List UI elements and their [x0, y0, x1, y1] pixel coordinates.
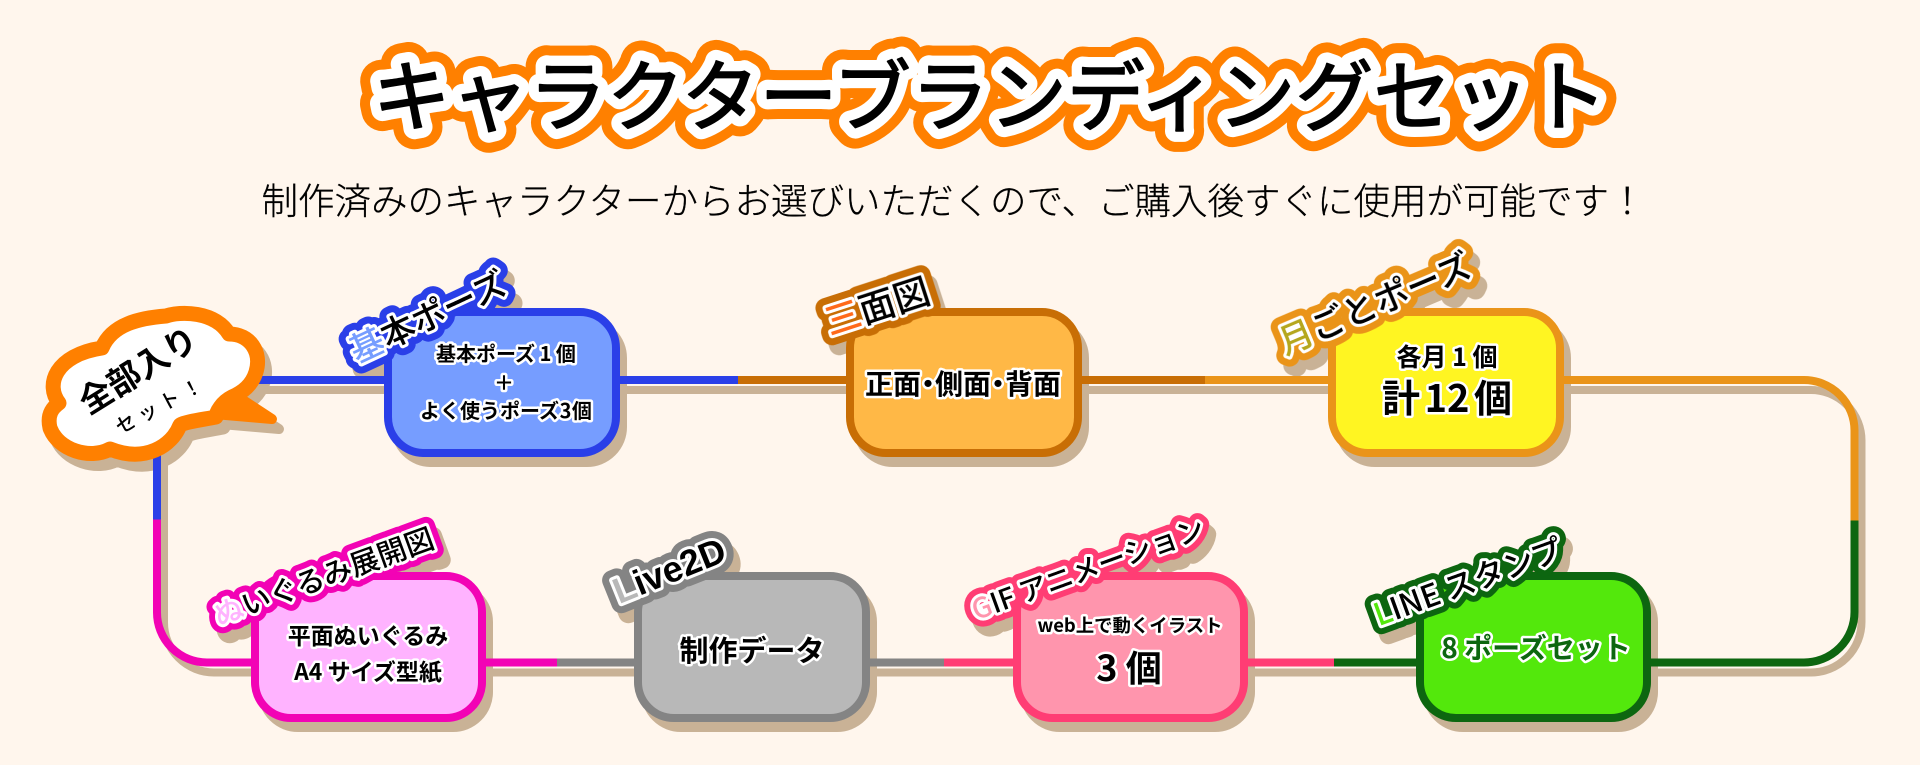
tag: 三面図: 三面図: [817, 263, 936, 346]
tag: GIFアニメーション: GIF アニメーション: [966, 507, 1210, 629]
callout: 全部入り speech bubble: [49, 313, 272, 454]
box text: 計 12 個: [1382, 368, 1512, 423]
box text: 基本ポーズ 1 個: [436, 338, 576, 367]
box text: [1037, 612, 1223, 692]
tag: LINEスタンプ: LINE スタンプ: [1366, 525, 1568, 635]
panel: 基本ポーズ: [388, 312, 616, 453]
box: [388, 312, 616, 453]
box text: 正面・側面・背面: [865, 363, 1061, 403]
box text: web上で動くイラスト: [1037, 612, 1223, 638]
box text: 制作データ: [679, 628, 825, 670]
box: [255, 576, 482, 718]
box text: [420, 338, 592, 424]
box: [1332, 312, 1560, 453]
title: キャラクターブランディングセット: [373, 36, 1607, 148]
connector loop: [157, 380, 1854, 662]
tag: 三面図: 三面図: [817, 263, 936, 346]
tag: 月ごとポーズ: 月ごとポーズ: [1270, 238, 1478, 364]
panel: 月ごとポーズ: [1332, 312, 1560, 453]
tag: Live2D: Live2D: [607, 529, 732, 612]
tag: GIFアニメーション: GIF アニメーション: [966, 507, 1210, 629]
box text: [288, 617, 448, 687]
bubble text: 全部入り: [68, 313, 206, 424]
box text: ＋: [494, 367, 514, 396]
panel: ぬいぐるみ展開図: [255, 576, 482, 718]
bubble cloud: [49, 313, 258, 454]
box: [1420, 576, 1647, 718]
tag: Live2D: Live2D: [607, 529, 732, 612]
box text: A4 サイズ型紙: [293, 653, 442, 687]
title: キャラクターブランディングセット: [373, 36, 1607, 148]
panel: LINEスタンプ: [1420, 576, 1647, 718]
panel: GIFアニメーション: [1017, 576, 1244, 718]
bubble tail: [214, 398, 272, 419]
box text: 3 個: [1096, 640, 1162, 692]
box text: よく使うポーズ 3 個: [420, 395, 592, 424]
tag: ぬいぐるみ展開図: ぬいぐるみ展開図: [207, 516, 439, 634]
flow diagram with drop shadow: [49, 238, 1855, 718]
box: [850, 312, 1078, 453]
box: [1017, 576, 1244, 718]
callout: 全部入り speech bubble: セット！: [109, 367, 211, 440]
tag: 月ごとポーズ: 月ごとポーズ: [1270, 238, 1478, 364]
tag: 基本ポーズ: 基本ポーズ: [340, 257, 514, 373]
box text: 8 ポーズセット: [1441, 627, 1631, 667]
title: キャラクターブランディングセット: [373, 36, 1607, 148]
panel: Live2D: [638, 576, 866, 718]
box text: 各月 1 個: [1396, 338, 1498, 374]
box text: 平面ぬいぐるみ: [288, 617, 448, 651]
tag: LINEスタンプ: LINE スタンプ: [1366, 525, 1568, 635]
tag: ぬいぐるみ展開図: ぬいぐるみ展開図: [207, 516, 439, 634]
box: [638, 576, 866, 718]
panel: 三面図: [850, 312, 1078, 453]
tag: 基本ポーズ: 基本ポーズ: [340, 257, 514, 373]
box text: [1382, 338, 1512, 423]
subtitle: 制作済みのキャラクターからお選びいただくので、ご購入後すぐに使用が可能です！: [261, 172, 1646, 225]
